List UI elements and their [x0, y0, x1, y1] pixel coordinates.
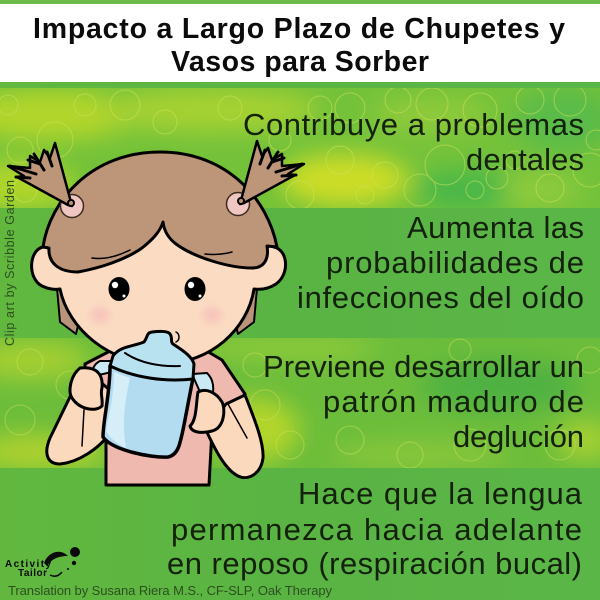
left arm [47, 368, 112, 464]
text block: swallowing pattern: Previene desarrollar un [263, 349, 584, 384]
cup [103, 331, 194, 457]
text block: swallowing pattern: patrón maduro de [323, 384, 584, 419]
logo: Activity Tailor [5, 547, 80, 579]
left hand [70, 368, 102, 409]
cheeks [90, 306, 222, 324]
band 3: yellow-green textured [0, 335, 600, 470]
title text: Vasos para Sorber [171, 46, 429, 78]
text block: swallowing pattern: deglución [453, 419, 584, 454]
cup handles [93, 361, 213, 392]
top accent bar [0, 0, 600, 4]
text block: ear infections: Aumenta las [407, 210, 584, 245]
text block: tongue forward: Hace que la lengua [298, 476, 583, 511]
cup lid [110, 331, 194, 380]
text block: dental problems: Contribuye a problemas [243, 107, 584, 142]
right eye [184, 277, 206, 301]
hair [43, 152, 277, 272]
title text: Impacto a Largo Plazo de Chupetes y [33, 13, 565, 45]
clip art credit: Clip art by Scribble Garden [3, 180, 17, 346]
text block: ear infections: infecciones del oído [297, 280, 584, 315]
logo wordmark: Activity [5, 559, 51, 570]
left pigtail [8, 143, 74, 206]
arm crease lines [82, 404, 247, 446]
right arm [206, 395, 263, 478]
text block: dental problems: dentales [466, 142, 584, 177]
torso [85, 350, 245, 485]
hair strand lines [92, 250, 232, 259]
hair tie right [226, 192, 250, 216]
logo wordmark: Tailor [18, 568, 47, 579]
right hand [190, 390, 224, 432]
band 1: yellow-green textured [0, 84, 600, 210]
hair behind the neck [57, 288, 257, 334]
text block: ear infections: probabilidades de [326, 245, 584, 280]
translation credit: Translation by Susana Riera M.S., CF-SLP, Oak Therapy [8, 583, 332, 598]
text block: tongue forward: en reposo (respiración bucal) [167, 546, 582, 581]
title panel [0, 4, 600, 82]
logo face [44, 552, 68, 566]
text block: tongue forward: permanezca hacia adelante [171, 512, 582, 547]
illustration: girl drinking from sippy cup [8, 141, 304, 485]
logo dots [70, 547, 80, 557]
hair tie left [60, 194, 84, 218]
left eye [108, 277, 130, 301]
right pigtail [238, 141, 304, 204]
mouth mark [176, 332, 179, 342]
ears and face [32, 200, 286, 364]
